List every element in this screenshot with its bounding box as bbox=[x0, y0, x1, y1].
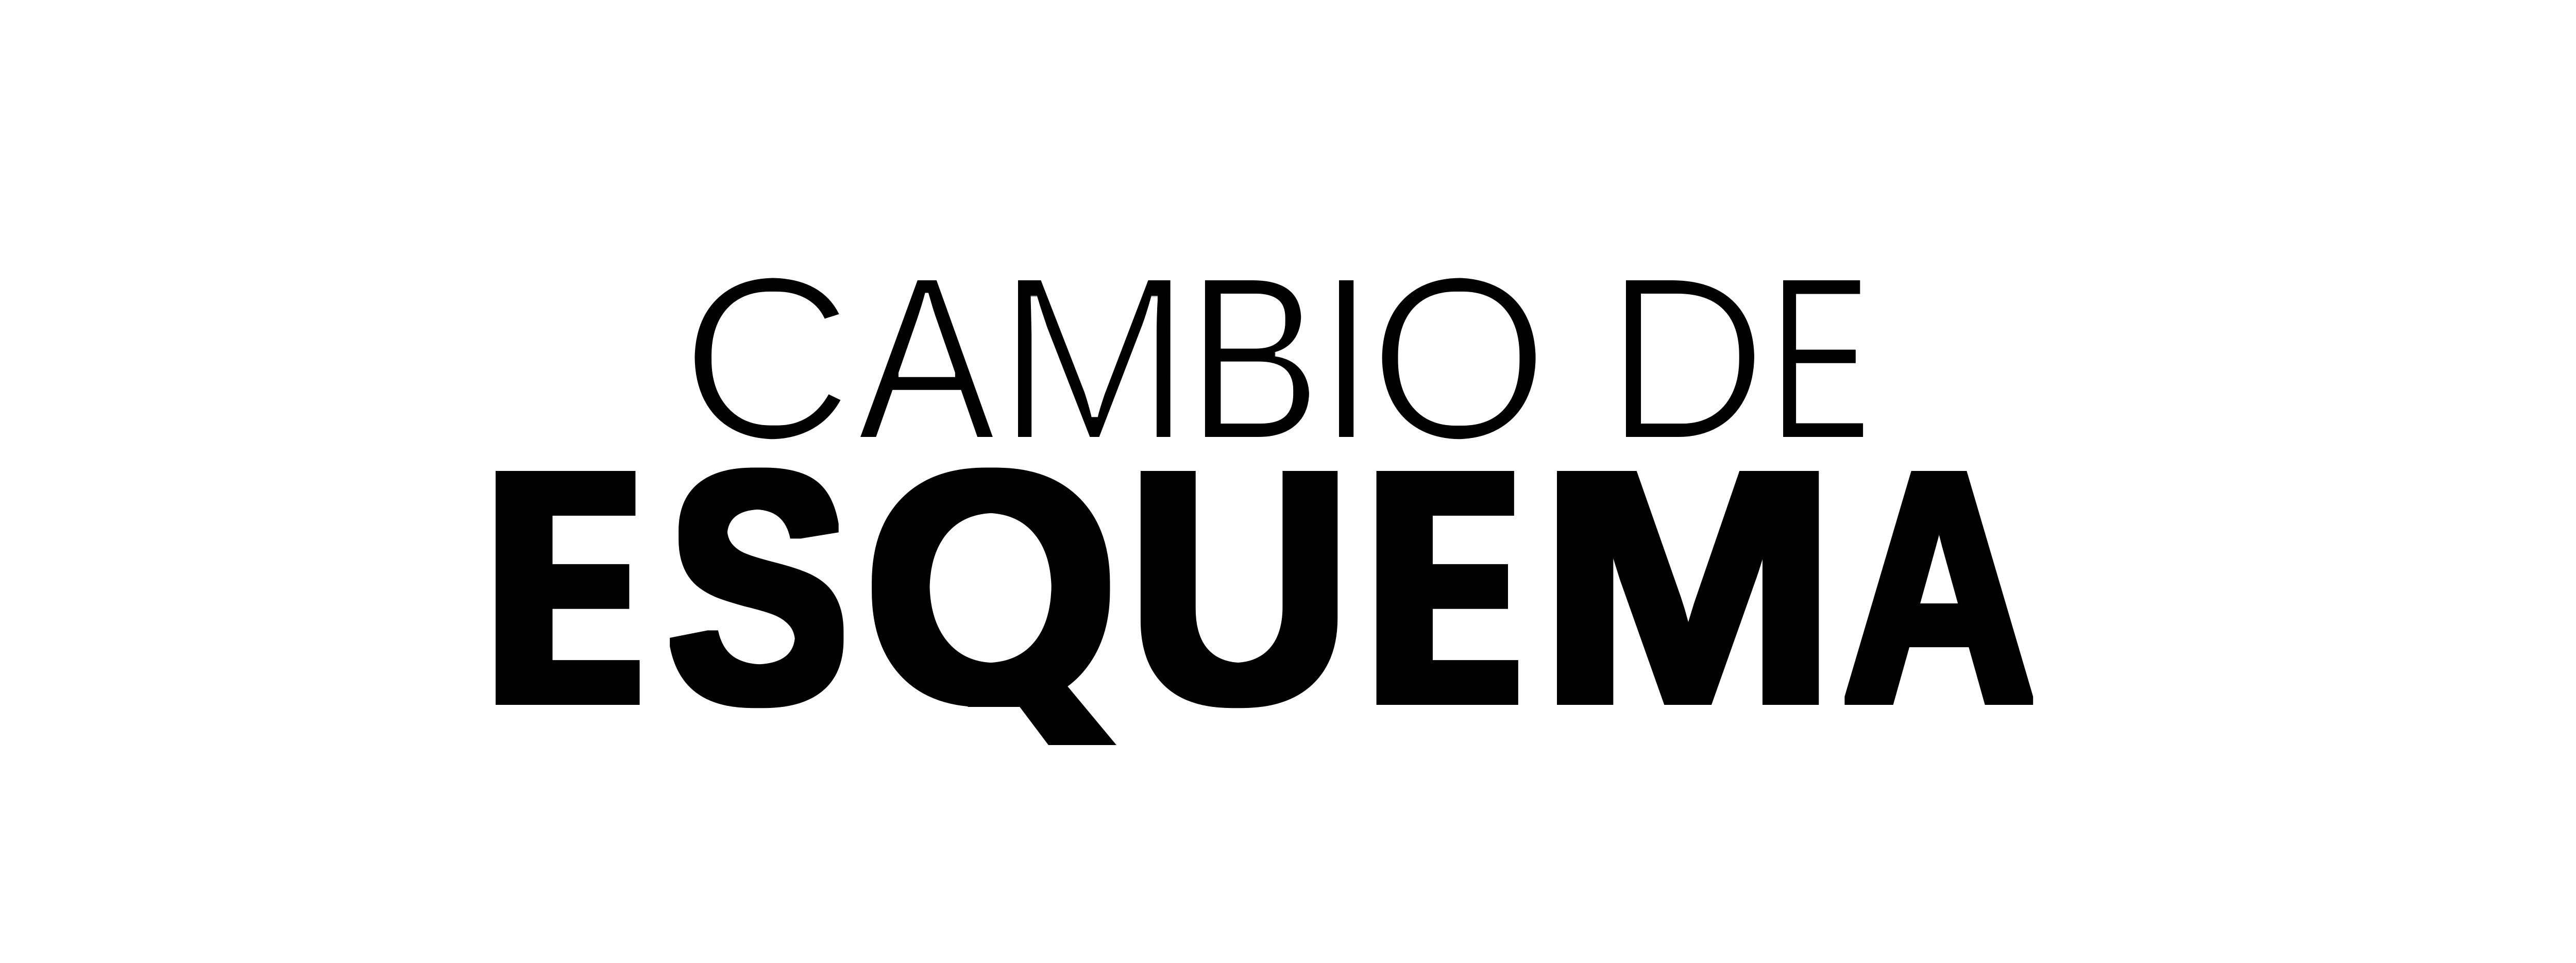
heading line: ESQUEMA: E bbox=[495, 404, 634, 771]
heading line: CAMBIO DE: I bbox=[1315, 228, 1377, 488]
heading line: ESQUEMA: U bbox=[1127, 404, 1351, 771]
heading line: ESQUEMA: A bbox=[1843, 404, 2035, 770]
heading line: ESQUEMA: Q bbox=[863, 404, 1118, 770]
heading line: CAMBIO DE: B bbox=[1187, 228, 1321, 488]
heading line: CAMBIO DE: D bbox=[1604, 227, 1768, 488]
heading line: CAMBIO DE: C bbox=[679, 227, 855, 488]
heading line: CAMBIO DE: O bbox=[1368, 228, 1550, 489]
heading line: CAMBIO DE: A bbox=[857, 228, 997, 489]
heading line: CAMBIO DE: M bbox=[995, 228, 1193, 488]
title bbox=[496, 278, 2033, 745]
heading line: ESQUEMA: M bbox=[1538, 404, 1838, 770]
heading line: ESQUEMA: S bbox=[667, 404, 849, 771]
heading line: ESQUEMA: E bbox=[1376, 404, 1513, 771]
heading line: CAMBIO DE: E bbox=[1770, 227, 1870, 489]
